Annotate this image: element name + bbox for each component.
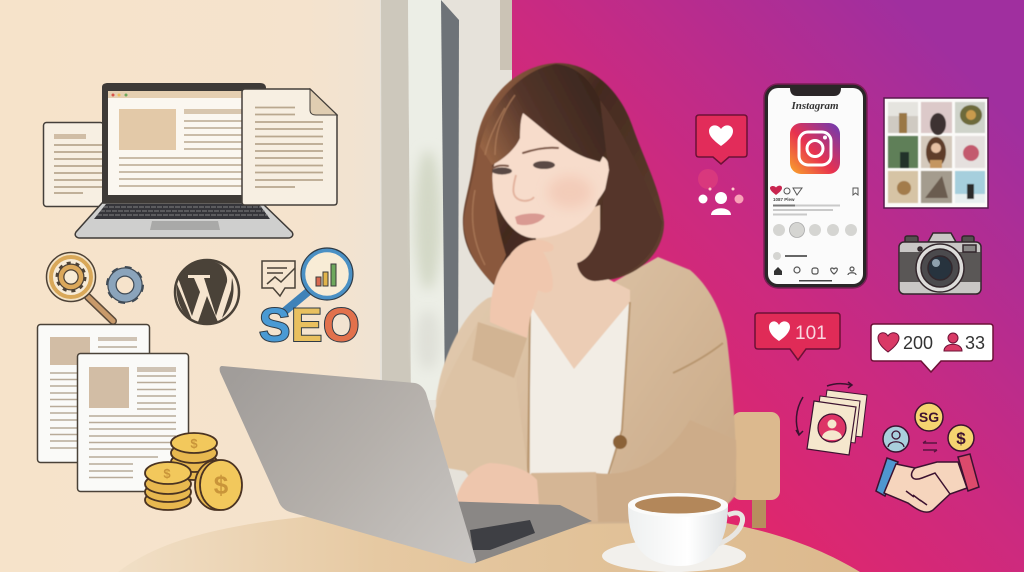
woman: raised hand [490,240,554,338]
woman: eyebrows [493,148,558,168]
woman: right cuff [531,472,598,521]
post caption lines [773,206,840,214]
woman: right forearm sleeve [590,420,736,522]
stacks of gold coins: $ [214,470,229,500]
story circles [773,222,857,238]
woman: face [492,113,610,238]
like counter 101 [755,313,840,360]
stacks of gold coins: $ [163,466,171,481]
woman: right hair strand [577,100,662,281]
table [118,506,860,572]
white counter 200 and 33: 200 [903,333,933,353]
SG coin: SG [919,409,939,425]
post likes text: 1087 Plew [773,197,795,202]
woman: hair back [463,63,664,285]
background: magenta gradient right side [512,0,1024,572]
right document [242,89,337,205]
Instagram app title: Instagram [790,100,839,112]
left document [44,122,104,206]
woman: raised sleeve cuff [472,322,527,378]
woman: typing hand [456,463,540,527]
stacks of gold coins [145,433,242,510]
woman: cardigan edge lines [528,302,723,476]
magnifier with gear [46,252,113,321]
person circle [883,426,909,452]
laptop lid [220,366,476,564]
bottom navigation [774,267,856,275]
WordPress logo [175,260,239,324]
stacks of gold coins: $ [190,436,198,451]
chair [732,412,780,528]
photo grid [884,98,988,208]
woman: eyes [492,161,555,175]
gear icon [108,268,142,302]
like counter 101: 101 [795,323,827,344]
post actions [770,186,858,195]
handshake [876,454,979,512]
blog illustrations [38,83,360,510]
home indicator [799,280,832,282]
woman: cheek blush [548,176,592,208]
Instagram illustrations [696,84,993,512]
phone notch [790,88,841,96]
woman: left hair strand [464,145,506,284]
Instagram logo [790,123,840,174]
woman: raised sleeve [434,322,528,478]
woman [434,63,736,527]
comment row [773,252,807,260]
coffee cup and saucer [602,493,746,572]
woman: cardigan body [436,257,736,524]
dollar coin: $ [956,429,966,448]
woman: nose [513,175,534,201]
background: warm beige left side [0,0,385,572]
woman: lips [515,213,545,225]
SEO illustration [259,248,360,351]
front article page [78,354,188,492]
woman: white top [530,302,630,474]
chart speech bubble [262,261,295,296]
heart speech bubble [696,115,747,164]
woman: bangs [479,64,606,165]
SEO word: S [259,298,290,351]
smartphone [764,84,867,288]
laptop deck [410,500,592,563]
background: cafe window [380,0,515,572]
back article page [38,324,150,462]
laptop keyboard [470,520,535,550]
laptop with blog page [75,83,293,238]
white counter 200 and 33 [871,324,993,372]
magnifier bar chart [301,248,353,300]
woman: neck [530,205,630,372]
SEO word: E [291,298,322,351]
exchange arrows [923,441,937,452]
camera [899,233,981,294]
followers icon [698,169,744,215]
collaboration icons [876,403,979,512]
repost documents with arrows [796,382,867,455]
woman: cardigan button [613,435,627,449]
open laptop in front [220,366,592,564]
magnifier handle [285,291,309,311]
SEO word: O [323,298,360,351]
white counter 200 and 33: 33 [965,333,985,353]
woman: hair highlights [472,95,515,265]
